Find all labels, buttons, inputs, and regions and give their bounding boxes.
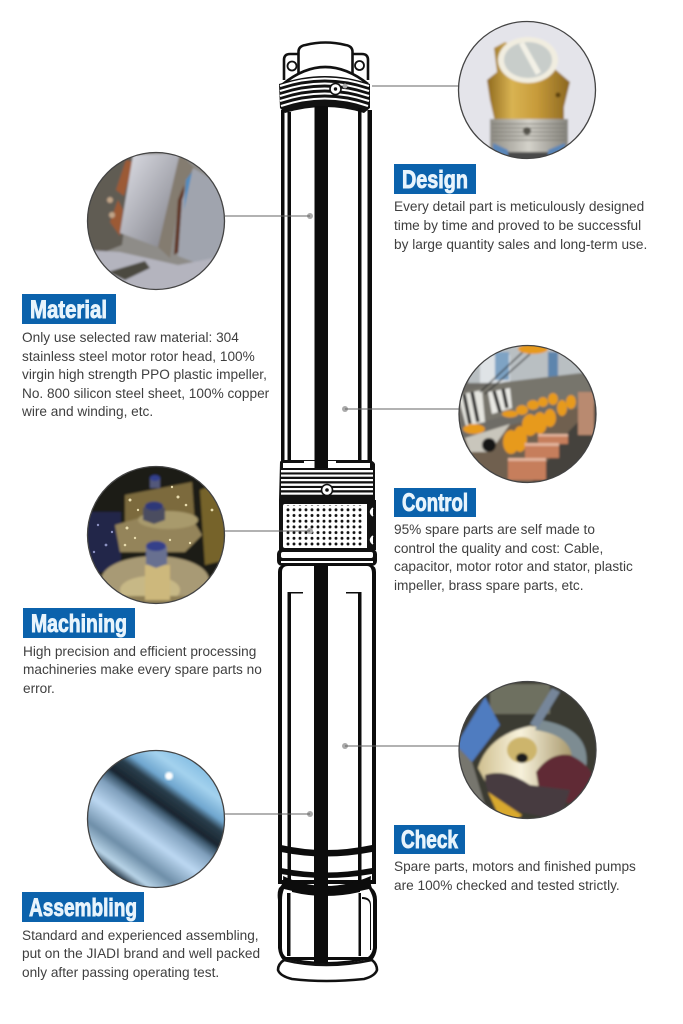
photo ring — [88, 466, 224, 604]
description: Standard and experienced assembling, — [22, 928, 259, 943]
description: No. 800 silicon steel sheet, 100% copper — [22, 386, 270, 401]
heading: Material — [30, 296, 107, 324]
photo ring — [459, 682, 596, 818]
middle threaded coupling — [279, 458, 375, 500]
motor base section — [278, 876, 377, 963]
heading: Check — [401, 826, 458, 854]
upper barrel — [281, 106, 372, 468]
connector line — [225, 530, 310, 532]
panel: check — [345, 680, 636, 893]
photo: brass parts on lathe — [88, 467, 224, 603]
description: 95% spare parts are self made to — [394, 522, 595, 537]
connector line — [345, 408, 459, 410]
pump illustration — [277, 42, 377, 981]
pump foot — [278, 960, 377, 981]
heading: Machining — [31, 610, 127, 638]
panel: control — [345, 340, 633, 593]
connector line — [345, 745, 459, 747]
description: by large quantity sales and long-term use. — [394, 237, 647, 252]
photo ring — [459, 346, 596, 482]
description: capacitor, motor rotor and stator, plastic — [394, 559, 633, 574]
panel: material — [21, 150, 310, 419]
lower barrel — [278, 213, 376, 958]
perforated intake screen — [279, 500, 376, 550]
photo ring — [88, 750, 224, 888]
pump cap — [283, 42, 368, 84]
connector line — [225, 813, 310, 815]
description: only after passing operating test. — [22, 965, 219, 980]
photo: brass check valve — [455, 20, 600, 160]
description: machineries make every spare parts no — [23, 662, 262, 677]
photo: motor stator — [88, 153, 224, 289]
description: High precision and efficient processing — [23, 644, 256, 659]
description: wire and winding, etc. — [21, 404, 153, 419]
threaded head — [279, 76, 370, 113]
heading: Design — [402, 166, 468, 194]
photo ring — [88, 152, 224, 290]
heading: Control — [402, 489, 468, 517]
description: Spare parts, motors and finished pumps — [394, 859, 636, 874]
connector line — [225, 215, 310, 217]
description: control the quality and cost: Cable, — [394, 541, 603, 556]
description: error. — [23, 681, 55, 696]
description: virgin high strength PPO plastic impeller, — [22, 367, 267, 382]
photo: gloved hand measuring part — [460, 682, 596, 818]
description: stainless steel motor rotor head, 100% — [22, 349, 255, 364]
photo: polished steel barrel — [88, 751, 224, 887]
heading: Assembling — [29, 894, 137, 922]
panel: machining — [23, 465, 310, 696]
photo: winding machines and copper spools — [460, 346, 596, 482]
panel: assembling — [22, 748, 310, 980]
ring collar — [277, 549, 377, 566]
connector line — [372, 85, 459, 87]
description: put on the JIADI brand and well packed — [22, 946, 260, 961]
description: Only use selected raw material: 304 — [22, 330, 239, 345]
photo ring — [458, 22, 596, 158]
description: time by time and proved to be successful — [394, 218, 641, 233]
description: are 100% checked and tested strictly. — [394, 878, 620, 893]
description: Every detail part is meticulously designed — [394, 199, 644, 214]
panel: design — [372, 20, 647, 252]
description: impeller, brass spare parts, etc. — [394, 578, 584, 593]
